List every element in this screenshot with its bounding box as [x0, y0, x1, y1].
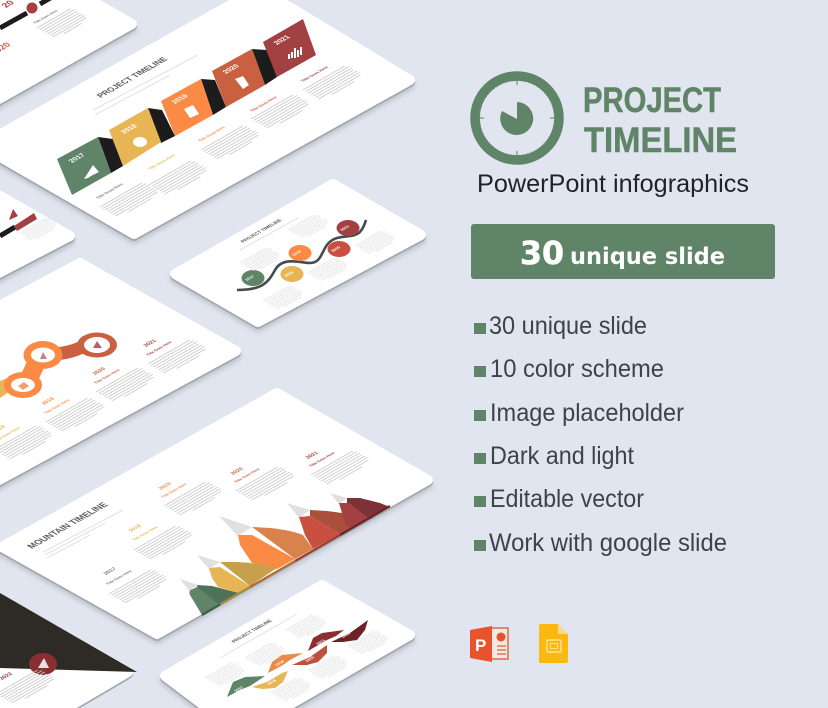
black folds — [98, 49, 277, 173]
item: 30 unique slide: 30 unique slide — [489, 312, 647, 340]
slide: partial black timeline top left: Title Goes Here — [32, 9, 59, 24]
caption 2020: 2020 — [230, 467, 245, 476]
icon: PowerPoint: P — [475, 636, 486, 655]
title: PROJECT — [583, 81, 721, 120]
slide: leaf timeline — [165, 585, 410, 708]
leaf 2018: 2018 — [266, 678, 278, 685]
block: 2017: 2017 — [68, 153, 87, 164]
slide: partial black timeline top left — [0, 0, 132, 109]
heading: PROJECT TIMELINE — [231, 619, 275, 644]
caption 2020: Title Goes Here — [233, 468, 261, 483]
milestone 2018: 2018 — [283, 270, 295, 277]
caption 2019: Title Goes Here — [43, 399, 71, 414]
caption 2017: Title Goes Here — [105, 570, 133, 585]
block: 2019 — [161, 79, 213, 136]
caption 2021: 2021 — [305, 451, 320, 460]
caption 2021 — [305, 450, 373, 486]
leaf 2018 — [252, 671, 288, 689]
slide: project timeline folded ribbon — [0, 0, 410, 239]
milestone 2017: 2017 — [244, 274, 256, 281]
caption 2021: Title Goes Here — [308, 452, 336, 467]
text block 2019: Title Goes Here — [197, 125, 227, 142]
caption 2020: Title Goes Here — [93, 369, 121, 384]
icon: PowerPoint — [470, 626, 508, 662]
feature list — [474, 312, 727, 557]
caption 2020 — [230, 466, 298, 502]
caption 2017 — [103, 567, 171, 604]
leaf 2022 — [331, 620, 368, 642]
milestone 2021: 2021 — [339, 224, 351, 231]
base shade — [202, 506, 390, 615]
text block 2017 — [95, 182, 162, 218]
milestone 2021 — [336, 220, 360, 236]
item: editable vector: Editable vector — [490, 485, 644, 513]
block: 2017 — [57, 137, 111, 195]
milestone 2020 — [328, 241, 350, 257]
caption 2019 — [41, 397, 108, 432]
leaf 2021 — [308, 630, 344, 651]
item: work with google slide: Work with google slide — [489, 529, 727, 557]
text block 2018 — [147, 153, 211, 196]
banner: 30 unique slide — [471, 224, 775, 279]
banner: 30 unique slide: unique slide — [570, 244, 725, 270]
item: dark and light: Dark and light — [490, 442, 634, 470]
slide: photo timeline — [0, 593, 137, 708]
mountain: yellow — [220, 562, 277, 586]
block: 2019: 2019 — [171, 94, 190, 105]
leaf 2019: 2019 — [274, 659, 286, 666]
mountain: green — [197, 585, 239, 615]
caption 2019: 2019 — [158, 482, 173, 491]
snow caps — [180, 493, 347, 591]
title: TIMELINE — [584, 121, 737, 160]
leaf 2019 — [268, 653, 303, 673]
caption 2018: Title Goes Here — [131, 526, 159, 541]
road — [237, 220, 366, 290]
slide: wavy road timeline — [175, 184, 421, 327]
block: 2021: 2021 — [273, 35, 292, 46]
leaf 2021: 2021 — [315, 638, 327, 645]
subtitle: PowerPoint infographics — [477, 170, 749, 198]
caption 2021: 2021 — [143, 339, 158, 348]
caption 2019 — [158, 481, 226, 516]
icon: clock — [475, 76, 559, 160]
milestone 2019: 2019 — [291, 249, 303, 256]
milestone 2018 — [280, 266, 304, 282]
text block 2017: Title Goes Here — [95, 182, 125, 199]
milestone 2017 — [242, 270, 264, 286]
caption 2020: 2020 — [92, 367, 107, 376]
heading: project timeline: PROJECT TIMELINE — [94, 55, 170, 99]
milestone 2019 — [288, 245, 312, 261]
block: 2020: 2020 — [222, 64, 241, 75]
slide: chain timeline — [0, 263, 236, 490]
slide: partial boxed timeline left — [0, 193, 70, 280]
caption 2018 — [128, 524, 196, 560]
text block 2021 — [300, 65, 365, 100]
caption 2019: Title Goes Here — [160, 483, 188, 498]
caption 2020 — [92, 367, 158, 402]
heading: mountain timeline: MOUNTAIN TIMELINE — [25, 501, 111, 550]
photo marker — [29, 653, 57, 675]
mountain: orange — [252, 527, 313, 559]
caption 2018: 2018 — [128, 524, 143, 533]
caption 2022 — [0, 669, 58, 704]
title — [583, 81, 737, 160]
text block 2021: Title Goes Here — [300, 65, 330, 82]
captions — [240, 214, 398, 310]
leaf 2020: 2020 — [304, 655, 316, 662]
caption 2021 — [143, 339, 210, 374]
slide: mountain timeline — [2, 393, 428, 639]
leaf 2017: 2017 — [233, 685, 245, 692]
caption 2017: 2017 — [103, 567, 118, 576]
leaf 2020 — [292, 645, 327, 665]
caption 2019: 2019 — [41, 397, 56, 406]
mountain: dark red — [347, 498, 390, 519]
item: 10 color scheme: 10 color scheme — [490, 355, 664, 383]
block: 2018: 2018 — [120, 124, 139, 135]
heading: PROJECT TIMELINE — [240, 218, 284, 244]
mountains chart — [180, 493, 390, 615]
leaf 2017 — [227, 676, 265, 697]
captions — [205, 614, 391, 702]
banner: 30 unique slide: 30 — [520, 234, 564, 272]
icon: Google Slides — [539, 624, 568, 663]
chain — [0, 332, 117, 398]
block: 2020 — [212, 49, 265, 107]
block: 2021 — [263, 19, 316, 77]
leaf 2022: 2022 — [340, 631, 352, 638]
block: 2018 — [109, 108, 161, 166]
text block 2019 — [197, 125, 263, 160]
text block 2020: Title Goes Here — [249, 95, 279, 112]
caption 2018 — [0, 425, 56, 460]
milestone 2020: 2020 — [330, 245, 342, 252]
slide mockups collage — [0, 0, 428, 708]
photo area — [0, 593, 137, 672]
item: image placeholder: Image placeholder — [490, 399, 684, 427]
text block 2020 — [249, 94, 313, 130]
text block 2018: Title Goes Here — [147, 153, 177, 170]
caption 2021: Title Goes Here — [145, 341, 173, 356]
mountain: red orange — [310, 510, 352, 534]
